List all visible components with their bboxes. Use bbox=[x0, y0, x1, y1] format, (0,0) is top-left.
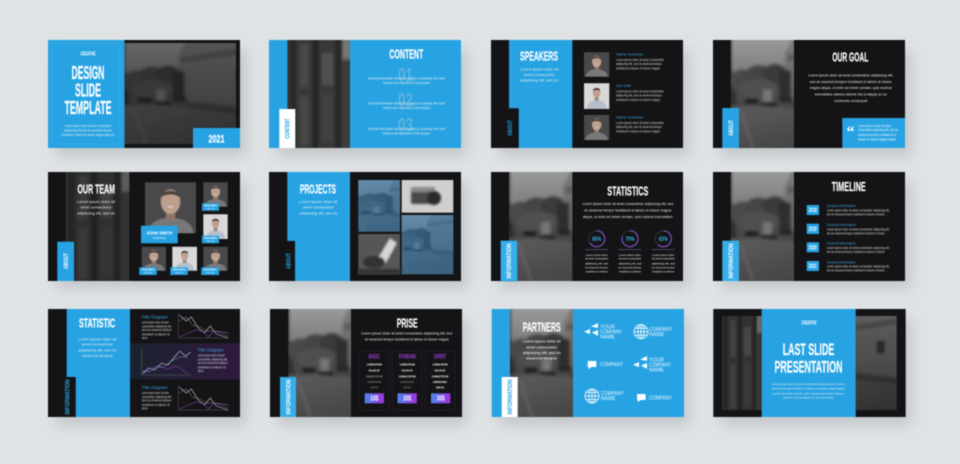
text block: do eiusmod tempor incididunt ut labore et dolore magna bbox=[365, 338, 449, 342]
diagram 3 bbox=[142, 385, 228, 410]
price column: basic: LOREM IPSUM bbox=[367, 362, 382, 366]
text block: Lorem ipsum dolor sit bbox=[78, 336, 117, 341]
partner logo 2: COMPANY bbox=[649, 327, 673, 333]
vertical tab: information: INFORMATION bbox=[64, 379, 72, 414]
diagram 1: Title Diagram bbox=[142, 314, 168, 320]
price column: basic bbox=[359, 351, 389, 410]
text block bbox=[582, 202, 673, 219]
partner logo 1: COMPANY bbox=[600, 330, 622, 336]
vertical tab: information: INFORMATION bbox=[286, 379, 292, 414]
speaker 3 bbox=[583, 114, 665, 141]
partner logo 4: NAME bbox=[649, 368, 665, 374]
diagram 1: Lorem ipsum dolor sit amet bbox=[142, 320, 169, 324]
text block: amet consectetur bbox=[80, 205, 112, 210]
team lead portrait: JOHN SMITH bbox=[146, 230, 172, 236]
team member 4: JOHN SMITH bbox=[172, 268, 186, 272]
speaker 3: Lorem ipsum dolor sit amet consectetur bbox=[616, 121, 665, 125]
timeline 2019: Lorem ipsum dolor sit amet consectetur adipiscing elit, bbox=[827, 227, 890, 231]
title: CONTENT bbox=[389, 47, 423, 61]
speaker 3: adipiscing elit, sed do eiusmod tempor bbox=[616, 125, 663, 129]
vertical tab: information: INFORMATION bbox=[507, 379, 514, 414]
vertical tab: about bbox=[491, 108, 519, 148]
vertical tab: information bbox=[722, 241, 739, 281]
text block bbox=[77, 199, 116, 216]
price column: expert: SED DO bbox=[436, 386, 445, 390]
title: STATISTICS bbox=[607, 185, 648, 199]
callout: quote: labore et dolore magna aliqua bbox=[858, 137, 896, 141]
diagram 2 highlighted band bbox=[130, 343, 240, 379]
text block: Lorem ipsum dolor sit amet consectetur adipiscing elit, sed bbox=[361, 332, 452, 336]
timeline 2018 bbox=[807, 204, 890, 216]
diagram 1: dolore bbox=[142, 336, 148, 340]
partner logo 3 bbox=[588, 361, 623, 369]
title: OUR TEAM bbox=[78, 182, 115, 196]
panel: slide 3 speakers bbox=[491, 40, 683, 148]
text block: Lorem ipsum dolor sit bbox=[520, 66, 559, 72]
title: OUR GOAL bbox=[832, 51, 868, 65]
partner logo 1: YOUR bbox=[600, 324, 615, 330]
panel: slide 7 statistics bbox=[469, 161, 690, 292]
callout: quote bbox=[842, 118, 905, 148]
title: PROJECTS bbox=[300, 182, 336, 196]
price column: standard: DOLOR SIT bbox=[402, 368, 413, 372]
price column: standard: STANDARD bbox=[399, 354, 416, 360]
price column: standard: SED DO bbox=[403, 386, 412, 390]
text block: eiusmod tempor bbox=[82, 353, 114, 358]
text block: adipiscing elit sed do eiusmod tempor bbox=[64, 128, 113, 132]
price column: expert: 30$ bbox=[437, 396, 445, 403]
content item 02 bbox=[368, 90, 445, 110]
text block: sed do eiusmod tempor incididunt ut labore et dolore bbox=[810, 80, 892, 84]
diagram 2 highlighted band: Title Diagram bbox=[198, 348, 224, 352]
price column: standard: 20$ bbox=[403, 396, 411, 403]
partner logo 5: COMPANY bbox=[601, 391, 624, 397]
stat 63%: sit amet consectetur bbox=[652, 256, 675, 260]
vertical tab: about bbox=[269, 241, 295, 281]
panel: slide 6 projects bbox=[269, 172, 499, 281]
text block bbox=[520, 66, 559, 82]
text block: adipiscing elit, sed do bbox=[77, 211, 116, 216]
diagram 2 highlighted band: sed do eiusmod tempor bbox=[198, 361, 229, 365]
text block: Lorem ipsum dolor sit amet consectetur adipiscing elit, bbox=[808, 74, 893, 78]
vertical tab: about: ABOUT bbox=[286, 253, 292, 269]
text block: Lorem ipsum dolor sit amet consectetur adipiscing elit, sed bbox=[582, 202, 673, 206]
text block: commodo consequat bbox=[834, 99, 867, 103]
text block: magna aliqua, ut enim ad minim veniam, quis nostrud bbox=[810, 86, 892, 90]
price column: expert: EXPERT bbox=[434, 354, 446, 360]
text block: laboris nisi ut aliquip ex ea commodo bbox=[784, 396, 834, 400]
timeline 2018: General information bbox=[827, 204, 856, 208]
speaker 2: Lorem ipsum dolor sit amet consectetur bbox=[616, 90, 665, 94]
stat 63%: Lorem ipsum dolor bbox=[652, 253, 674, 257]
blue center panel bbox=[762, 309, 856, 417]
photo: street bbox=[124, 42, 236, 144]
timeline 2021: sed do eiusmod tempor incididunt ut labore et dolore bbox=[827, 269, 885, 273]
team member 4 bbox=[170, 246, 198, 275]
panel: slide 4 our goal bbox=[691, 29, 912, 159]
content item 03: 03 bbox=[398, 115, 413, 135]
panel: slide 2 content bbox=[269, 29, 461, 159]
photo: street bbox=[730, 171, 795, 282]
diagram 2 highlighted band: Lorem ipsum dolor sit amet bbox=[198, 354, 225, 358]
text block: adipiscing elit, sed do bbox=[78, 347, 117, 352]
project image: blue street 2 bbox=[373, 209, 499, 280]
text block: do eiusmod tempor incididunt ut labore et dolore magna bbox=[584, 208, 671, 212]
text block: ut enim ad minim veniam, quis nostrud exercitation ullamco bbox=[772, 391, 845, 395]
speaker 2: incididunt ut labore et dolore magna bbox=[616, 98, 660, 102]
team member 1: JOHN SMITH bbox=[204, 204, 217, 208]
timeline 2020: 2020 bbox=[809, 245, 817, 251]
team member 4: FUNCTION bbox=[175, 273, 183, 275]
year badge: 2021 bbox=[208, 134, 224, 146]
stat 60%: sit amet consectetur bbox=[585, 256, 608, 260]
diagram 1 bbox=[142, 313, 228, 340]
vertical tab: information bbox=[502, 377, 518, 417]
partner logo 6 bbox=[637, 394, 672, 402]
text block: Lorem ipsum dolor sit amet consectetur bbox=[64, 124, 112, 128]
line chart 3 bbox=[178, 385, 228, 410]
content item 02: theses and objectives of the project bbox=[383, 106, 430, 110]
text block: eiusmod tempor bbox=[526, 356, 558, 361]
stat 60%: adipiscing elit, sed bbox=[585, 261, 609, 265]
price column: basic: 10$ bbox=[370, 396, 378, 403]
blue side panel bbox=[48, 40, 124, 148]
timeline 2020: sed do eiusmod tempor incididunt ut labore et dolore bbox=[827, 250, 885, 254]
vertical tab: content: CONTENT bbox=[284, 118, 292, 138]
team lead portrait: FUNCTION bbox=[153, 236, 166, 240]
price column: standard: ADIPISCING bbox=[400, 380, 414, 384]
stat 60%: do eiusmod tempor bbox=[585, 265, 608, 269]
text block: Lorem ipsum dolor sit bbox=[523, 339, 562, 344]
title: SLIDE bbox=[75, 80, 101, 100]
stat 60%: 60% bbox=[592, 237, 602, 243]
team member 5: FUNCTION bbox=[206, 273, 214, 275]
speaker 1: Name Surname bbox=[616, 52, 643, 56]
content item 01: 01 bbox=[398, 65, 413, 85]
timeline 2021: General information bbox=[827, 260, 856, 264]
slide shadows bbox=[56, 50, 911, 425]
timeline 2019: General information bbox=[827, 223, 856, 227]
timeline 2021 bbox=[807, 260, 890, 273]
stat 63%: do eiusmod tempor bbox=[652, 265, 675, 269]
stat 70%: incididunt ut labore bbox=[619, 270, 641, 274]
blue side panel bbox=[67, 309, 130, 417]
stat 63%: adipiscing elit, sed bbox=[652, 261, 675, 265]
text block: aliqua, ut enim ad minim veniam, quis nostrud exercitation bbox=[583, 215, 673, 219]
vertical tab: information bbox=[280, 377, 296, 417]
stat 63%: incididunt ut labore bbox=[652, 270, 675, 274]
team member 3: FUNCTION bbox=[144, 273, 152, 275]
vertical tab: information: INFORMATION bbox=[728, 243, 735, 278]
title: STATISTIC bbox=[79, 316, 115, 330]
timeline 2019: sed do eiusmod tempor incididunt ut labore et dolore bbox=[827, 231, 885, 235]
stat 60% bbox=[585, 231, 609, 274]
text block: adipiscing elit, sed do bbox=[523, 350, 561, 355]
photo: facade bbox=[66, 172, 130, 282]
text block bbox=[361, 332, 452, 342]
title: LAST SLIDE bbox=[783, 341, 834, 359]
vertical tab: content bbox=[279, 109, 295, 148]
stat 70%: adipiscing elit, sed bbox=[618, 261, 642, 265]
photo: street bbox=[288, 308, 352, 418]
title bbox=[64, 63, 112, 118]
team member 3: JOHN SMITH bbox=[142, 268, 154, 272]
title: TIMELINE bbox=[832, 180, 866, 194]
vertical tab: information bbox=[501, 241, 517, 281]
diagram 3: incididunt ut labore et bbox=[142, 403, 170, 407]
team member 3 bbox=[139, 246, 167, 275]
price column: expert bbox=[426, 351, 455, 410]
diagram 3: Title Diagram bbox=[142, 385, 168, 390]
stat 60%: Lorem ipsum dolor bbox=[586, 253, 608, 257]
blue side panel bbox=[287, 172, 350, 281]
stat 70%: do eiusmod tempor bbox=[618, 265, 642, 269]
price column: expert: DOLOR SIT bbox=[434, 368, 446, 372]
timeline 2020: General information bbox=[827, 242, 856, 246]
stat 70%: sit amet consectetur bbox=[618, 256, 642, 260]
vertical tab: about: ABOUT bbox=[63, 253, 70, 269]
team lead portrait bbox=[141, 180, 199, 243]
content item 03 bbox=[368, 115, 445, 136]
stat 60%: incididunt ut labore bbox=[586, 270, 608, 274]
callout: quote: eiusmod tempor incididunt ut bbox=[858, 133, 896, 137]
price column: basic: BASIC bbox=[369, 354, 380, 360]
price column: basic: DOLOR SIT bbox=[369, 368, 380, 372]
line chart 2 bbox=[142, 349, 192, 375]
team member 5 bbox=[201, 246, 229, 275]
vertical tab: information: INFORMATION bbox=[506, 243, 513, 278]
photo: building right bbox=[855, 316, 898, 410]
project image: hand with phone bbox=[358, 234, 400, 274]
small heading: CREATIVE bbox=[802, 320, 817, 326]
timeline 2019: 2019 bbox=[809, 227, 817, 233]
photo: street bbox=[508, 171, 573, 282]
speaker 3: incididunt ut labore et dolore magna bbox=[616, 130, 660, 134]
title bbox=[774, 341, 842, 376]
stat 70% bbox=[618, 231, 642, 274]
partner logo 4: YOUR bbox=[649, 358, 664, 364]
stat 63% bbox=[652, 231, 675, 274]
text block: Lorem ipsum dolor sit amet consectetur adipiscing elit, sed do bbox=[772, 382, 845, 386]
diagram 1: sed do eiusmod tempor bbox=[142, 328, 173, 332]
text block: eiusmod tempor incididunt ut labore et dolore magna aliqua, bbox=[772, 386, 846, 390]
diagram 3: Lorem ipsum dolor sit amet bbox=[142, 391, 169, 395]
panel: slide 9 statistic bbox=[48, 309, 240, 417]
text block bbox=[808, 74, 893, 103]
speaker 1: Lorem ipsum dolor sit amet consectetur bbox=[616, 58, 665, 62]
team member 2: FUNCTION bbox=[206, 241, 215, 243]
price column: expert: LOREM IPSUM bbox=[432, 362, 448, 366]
diagram 1: incididunt ut labore et bbox=[142, 332, 170, 336]
stat 70%: Lorem ipsum dolor bbox=[619, 253, 641, 257]
partner logo 3: COMPANY bbox=[600, 362, 623, 368]
panel: slide 12 last slide bbox=[713, 307, 940, 419]
diagram 3: dolore bbox=[142, 406, 148, 410]
text block bbox=[772, 382, 846, 400]
panel: slide 11 partners bbox=[470, 298, 690, 428]
speaker 1: incididunt ut labore et dolore magna bbox=[616, 66, 660, 70]
title: DESIGN bbox=[72, 63, 104, 83]
text block: amet consectetur bbox=[524, 72, 555, 77]
vertical tab: information bbox=[48, 377, 76, 417]
timeline 2021: Lorem ipsum dolor sit amet consectetur adipiscing elit, bbox=[827, 265, 890, 269]
partner logo 4: COMPANY bbox=[649, 362, 671, 368]
diagram 2 highlighted band: dolore bbox=[198, 369, 204, 373]
timeline 2020: Lorem ipsum dolor sit amet consectetur adipiscing elit, bbox=[827, 246, 890, 250]
price column: expert: CONSECTETUR bbox=[432, 374, 448, 378]
team member 2 bbox=[202, 213, 229, 243]
title: PARTNERS bbox=[523, 321, 561, 335]
diagram 2 highlighted band: incididunt ut labore et bbox=[198, 366, 226, 370]
diagram 3: consectetur adipiscing elit, bbox=[142, 395, 172, 399]
team member 1 bbox=[202, 181, 229, 211]
small heading: CREATIVE bbox=[80, 52, 96, 58]
diagram 1: consectetur adipiscing elit, bbox=[142, 324, 172, 328]
callout: quote: Lorem ipsum dolor sit amet bbox=[858, 124, 891, 128]
text block bbox=[78, 336, 117, 358]
partner logo 2 bbox=[634, 325, 673, 339]
partner logo 1 bbox=[584, 323, 622, 340]
content item 01: theses and objectives of the project bbox=[383, 81, 430, 85]
diagram 3: sed do eiusmod tempor bbox=[142, 398, 173, 402]
team member 5: JOHN SMITH bbox=[204, 268, 216, 272]
price column: standard: CONSECTETUR bbox=[399, 374, 416, 378]
partner logo 5 bbox=[585, 389, 624, 403]
content item 02: 02 bbox=[398, 90, 413, 110]
text block bbox=[62, 124, 115, 137]
panel: slide 1 design slide template bbox=[48, 33, 306, 154]
text block: Lorem ipsum dolor sit bbox=[299, 199, 338, 204]
price column: basic: CONSECTETUR bbox=[366, 374, 383, 378]
title: SPEAKERS bbox=[520, 50, 558, 64]
partner logo 4 bbox=[633, 356, 671, 374]
vertical tab: about: ABOUT bbox=[507, 120, 514, 136]
speaker 2: adipiscing elit, sed do eiusmod tempor bbox=[616, 94, 663, 98]
text block: amet consectetur bbox=[526, 344, 558, 349]
team member 2: JOHN SMITH bbox=[204, 236, 217, 240]
vertical tab: about bbox=[57, 242, 74, 281]
timeline 2018: sed do eiusmod tempor incididunt ut labore et dolore bbox=[827, 212, 885, 216]
diagram 2 highlighted band: consectetur adipiscing elit, bbox=[198, 358, 228, 362]
partner logo 2: NAME bbox=[649, 332, 665, 338]
timeline 2019 bbox=[807, 223, 890, 235]
year badge bbox=[193, 128, 240, 148]
text block: Lorem ipsum dolor sit bbox=[77, 199, 116, 204]
speaker 3: Name Surname bbox=[616, 116, 643, 120]
price column: basic: ADIPISCING bbox=[367, 380, 381, 384]
team member 1: FUNCTION bbox=[206, 208, 215, 210]
stat 70%: 70% bbox=[626, 237, 635, 243]
text block: amet consectetur bbox=[82, 342, 113, 347]
price column: standard: LOREM IPSUM bbox=[400, 362, 415, 366]
vertical tab: about bbox=[722, 108, 739, 148]
content item 03: General information about the project or company, the main bbox=[368, 127, 445, 131]
speaker 2: John Smith bbox=[616, 84, 631, 88]
speaker 1 bbox=[583, 51, 665, 78]
price column: basic: SED DO bbox=[370, 386, 379, 390]
photo: street bbox=[509, 308, 574, 418]
timeline 2020 bbox=[807, 242, 890, 254]
panel: slide 1 design slide template: TEMPLATE bbox=[64, 98, 112, 118]
panel: slide 5 our team bbox=[48, 161, 240, 292]
partner logo 1: NAME bbox=[600, 334, 616, 340]
text block: incididunt ut labore et dolore magna aliqua ut bbox=[62, 133, 115, 137]
text block bbox=[523, 339, 562, 361]
panel: slide 8 timeline bbox=[691, 161, 912, 292]
speaker 2 bbox=[583, 82, 665, 110]
price column: standard bbox=[392, 351, 422, 410]
callout: quote: consectetur adipiscing elit, sed do bbox=[858, 128, 898, 132]
text block bbox=[299, 199, 338, 216]
timeline 2018: Lorem ipsum dolor sit amet consectetur adipiscing elit, bbox=[827, 208, 890, 212]
blue side panel bbox=[509, 40, 572, 148]
price column: expert: ADIPISCING bbox=[433, 380, 447, 384]
content item 01: General information about the project or company, the main bbox=[368, 76, 445, 80]
callout: quote: “ bbox=[846, 124, 854, 141]
text block: adipiscing elit, sed do bbox=[520, 78, 559, 82]
partner logo 5: NAME bbox=[601, 396, 616, 402]
timeline 2021: 2021 bbox=[809, 264, 817, 270]
partner logo 6: COMPANY bbox=[649, 396, 672, 402]
photo: facade bbox=[286, 39, 351, 149]
stat 63%: 63% bbox=[659, 237, 668, 243]
speaker 1: adipiscing elit, sed do eiusmod tempor bbox=[616, 62, 663, 66]
photo: facade left bbox=[722, 316, 762, 410]
photo: street bbox=[730, 39, 795, 148]
text block: adipiscing elit, sed do bbox=[299, 211, 338, 216]
vertical tab: about: ABOUT bbox=[728, 120, 735, 136]
content item 02: General information about the project or company, the main bbox=[368, 102, 445, 106]
text block: amet consectetur bbox=[303, 205, 334, 210]
project image: blue street bbox=[324, 174, 476, 243]
content item 03: theses and objectives of the project bbox=[383, 132, 430, 136]
timeline 2018: 2018 bbox=[809, 208, 817, 214]
content item 01 bbox=[368, 65, 445, 85]
text block: exercitation ullamco laboris nisi ut aliquip ex ea bbox=[815, 92, 887, 96]
title: PRESENTATION bbox=[774, 358, 842, 376]
panel: slide 10 prise bbox=[248, 298, 467, 428]
title: PRISE bbox=[397, 316, 418, 330]
line chart 1 bbox=[178, 313, 228, 338]
project image: camera bbox=[402, 180, 453, 213]
